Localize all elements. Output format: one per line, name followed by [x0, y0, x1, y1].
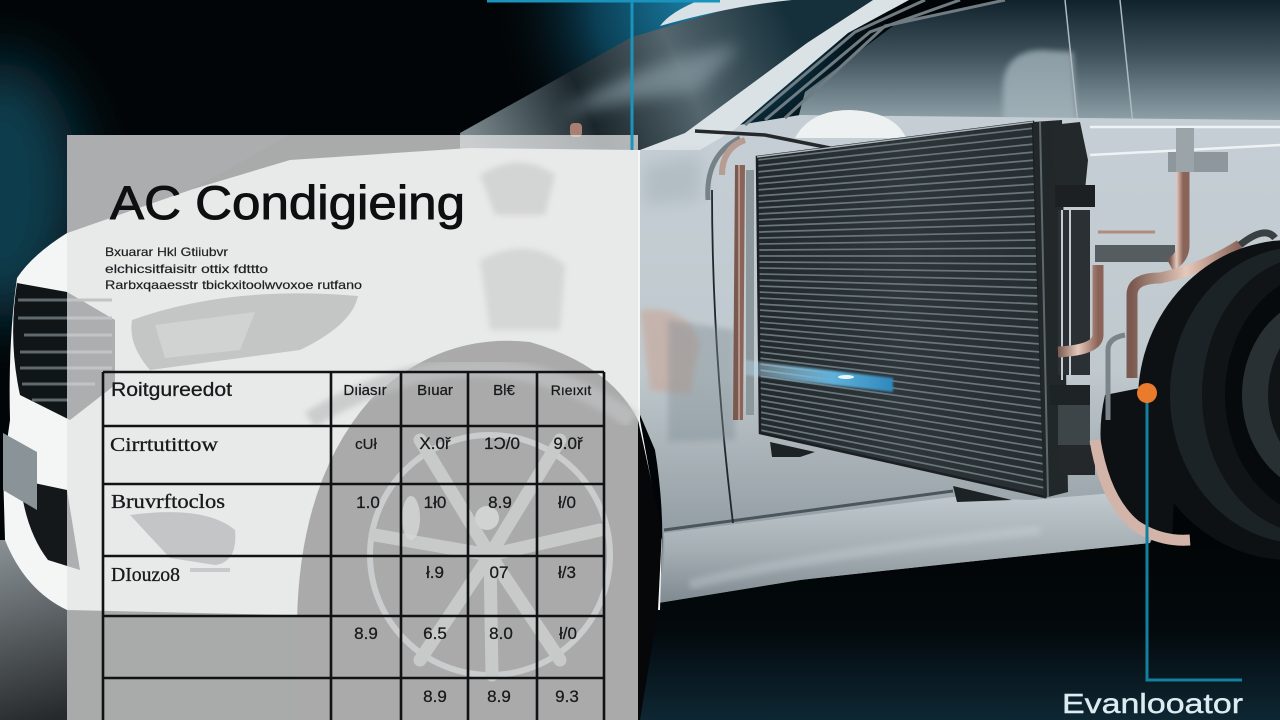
- door seam: [712, 190, 733, 523]
- compressor: [1138, 240, 1280, 560]
- title: AC Condigieing: [110, 176, 465, 229]
- table values: Bıuar: [417, 382, 453, 399]
- table values: 8.9: [487, 687, 511, 706]
- table values: 1ł0: [424, 493, 446, 512]
- faint engine sketch: [640, 309, 700, 395]
- table values: 8.9: [488, 493, 512, 512]
- table values: cUł: [355, 436, 377, 453]
- table row labels: Cirrtutittow: [110, 434, 219, 456]
- table grid: [103, 372, 604, 720]
- lower sill: [658, 490, 1150, 603]
- table row labels: DIouzo8: [111, 564, 180, 586]
- lower grille: [20, 480, 80, 570]
- engine parts behind panel: [480, 162, 565, 330]
- callout line: top: [487, 0, 720, 150]
- radiator feet: [770, 442, 1012, 502]
- callout marker: [1137, 383, 1157, 403]
- plumbing and tanks: [1050, 122, 1275, 540]
- table values: 6.5: [423, 624, 447, 643]
- table values: 8.9: [354, 624, 378, 643]
- callout label: Evanlooator: [1062, 688, 1243, 719]
- grey hood shade: [67, 135, 290, 233]
- table row labels: Roitgureedot: [111, 380, 233, 401]
- table values: Dıiasır: [343, 382, 387, 399]
- data table: [103, 372, 604, 720]
- right frame: [1033, 120, 1068, 498]
- table values: 1.0: [356, 493, 380, 512]
- car front and hood: [3, 148, 662, 616]
- wheel: [297, 341, 662, 720]
- table values: 8.0: [489, 624, 513, 643]
- table values: [343, 382, 591, 706]
- table values: X.0ř: [419, 434, 451, 453]
- copper pipes: [1170, 172, 1183, 265]
- fog lamp shadow: [130, 512, 235, 565]
- table row labels: Bruvrftoclos: [111, 491, 225, 513]
- headlight: [131, 293, 358, 370]
- car body side: [638, 0, 1280, 603]
- table values: 9.3: [555, 687, 579, 706]
- top valve: [1168, 152, 1228, 172]
- blue highlight: [745, 360, 893, 392]
- seat headrest: [795, 110, 906, 138]
- connector block: [1095, 245, 1175, 262]
- description text: Bxuarar Hkl Gtiiubvr: [105, 245, 228, 259]
- table values: ł/3: [558, 563, 576, 582]
- table values: ł/0: [558, 493, 576, 512]
- table values: 9.0ř: [553, 434, 583, 453]
- table row labels: [110, 380, 233, 586]
- car windows: [460, 0, 1280, 150]
- number plate: [3, 433, 37, 510]
- radiator fins: [757, 128, 1045, 488]
- description text: [105, 245, 362, 292]
- reservoir cap: [570, 123, 582, 137]
- table values: 07: [490, 563, 508, 582]
- condenser radiator: [695, 120, 1068, 502]
- pillar: [640, 0, 909, 150]
- upper grille: [13, 283, 115, 420]
- glass rails: [1090, 127, 1280, 155]
- table values: Bl€: [493, 382, 515, 399]
- description text: Rarbxqaaesstr tbickxitoolwvoxoe rutfano: [105, 278, 362, 292]
- callout line: evaporator: [1147, 400, 1242, 680]
- description text: elchicsitfaisitr ottix fdttto: [105, 262, 268, 276]
- table values: 1Ɔ/0: [484, 434, 520, 453]
- table values: ł.9: [426, 563, 444, 582]
- panel: [67, 135, 638, 720]
- table values: 8.9: [423, 687, 447, 706]
- table values: Rıeıxıt: [551, 382, 591, 398]
- table values: ł/0: [559, 624, 577, 643]
